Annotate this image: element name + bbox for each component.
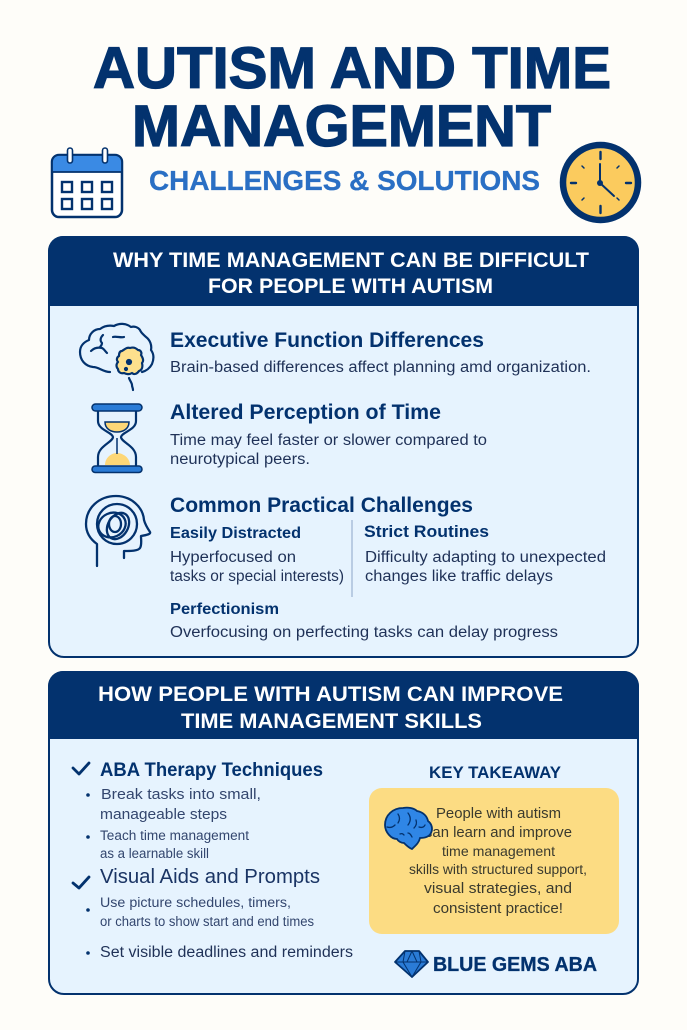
- panel: why time management is difficult: [48, 236, 639, 657]
- strict routines: Strict Routines: [364, 522, 489, 541]
- strict routines: changes like traffic delays: [365, 568, 553, 585]
- easily distracted: tasks or special interests): [170, 568, 344, 585]
- heading: WHY TIME MANAGEMENT CAN BE DIFFICULT: [113, 248, 589, 272]
- altered perception block: Altered Perception of Time: [170, 400, 441, 424]
- left column: ABA therapy techniques: as a learnable skill: [100, 846, 209, 861]
- callout: key takeaway: visual strategies, and: [424, 881, 572, 897]
- altered perception block: neurotypical peers.: [170, 451, 310, 468]
- heading: TIME MANAGEMENT SKILLS: [181, 709, 482, 733]
- subtitle: CHALLENGES & SOLUTIONS: [149, 165, 540, 196]
- strict routines: Difficulty adapting to unexpected: [365, 549, 606, 566]
- callout: key takeaway: People with autism: [436, 806, 561, 822]
- logo: Blue Gems ABA: BLUE GEMS ABA: [433, 954, 597, 976]
- callout: key takeaway: consistent practice!: [433, 901, 563, 917]
- left column: ABA therapy techniques: Break tasks into small,: [101, 786, 261, 803]
- icon: check: [73, 763, 89, 774]
- strict routines: [364, 522, 606, 585]
- easily distracted: Hyperfocused on: [170, 549, 296, 566]
- panel: how to improve: [48, 671, 639, 994]
- left column: ABA therapy techniques: manageable steps: [100, 806, 227, 823]
- left column: ABA therapy techniques: [73, 759, 323, 861]
- left column: visual aids and prompts: Use picture schedules, timers,: [100, 895, 291, 910]
- icon: clock: [563, 145, 638, 220]
- easily distracted: Easily Distracted: [170, 525, 301, 542]
- executive function block: Executive Function Differences: [170, 328, 484, 352]
- left column: visual aids and prompts: Set visible deadlines and reminders: [100, 944, 353, 961]
- logo: Blue Gems ABA: [395, 951, 597, 977]
- left column: ABA therapy techniques: Teach time management: [100, 828, 249, 843]
- easily distracted: [170, 525, 344, 585]
- executive function block: [170, 328, 591, 376]
- perfectionism: Perfectionism: [170, 601, 279, 618]
- icon: gem: [395, 951, 428, 977]
- icon: calendar: [52, 148, 122, 217]
- heading: [113, 248, 589, 298]
- altered perception block: [170, 400, 487, 468]
- perfectionism: Overfocusing on perfecting tasks can delay progress: [170, 624, 558, 641]
- left column: visual aids and prompts: or charts to show start and end times: [100, 914, 314, 929]
- left column: ABA therapy techniques: ABA Therapy Techniques: [100, 759, 323, 781]
- icon: head with tangled thoughts: [86, 496, 150, 566]
- icon: check: [73, 877, 89, 888]
- panel header: [48, 671, 639, 739]
- heading: [98, 682, 563, 733]
- heading: FOR PEOPLE WITH AUTISM: [208, 274, 493, 298]
- executive function block: Brain-based differences affect planning amd organization.: [170, 359, 591, 376]
- title: MANAGEMENT: [132, 94, 551, 159]
- key takeaway heading: KEY TAKEAWAY: [429, 764, 561, 782]
- common practical challenges block: Common Practical Challenges: [170, 493, 473, 517]
- callout: key takeaway: time management: [442, 843, 555, 859]
- icon: brain: [80, 324, 153, 390]
- panel header: [48, 236, 639, 306]
- left column: visual aids and prompts: Visual Aids and Prompts: [100, 866, 320, 888]
- title: [93, 36, 611, 159]
- icon: blue brain: [385, 808, 432, 849]
- common practical challenges block: [170, 493, 606, 641]
- icon: hourglass: [92, 404, 142, 472]
- altered perception block: Time may feel faster or slower compared to: [170, 432, 487, 449]
- left column: visual aids and prompts: [73, 866, 353, 961]
- heading: HOW PEOPLE WITH AUTISM CAN IMPROVE: [98, 682, 563, 706]
- callout: key takeaway: can learn and improve: [425, 825, 572, 841]
- title: AUTISM AND TIME: [93, 36, 611, 101]
- perfectionism: [170, 601, 558, 641]
- callout: key takeaway: skills with structured support,: [409, 862, 587, 877]
- callout: key takeaway: [369, 788, 619, 934]
